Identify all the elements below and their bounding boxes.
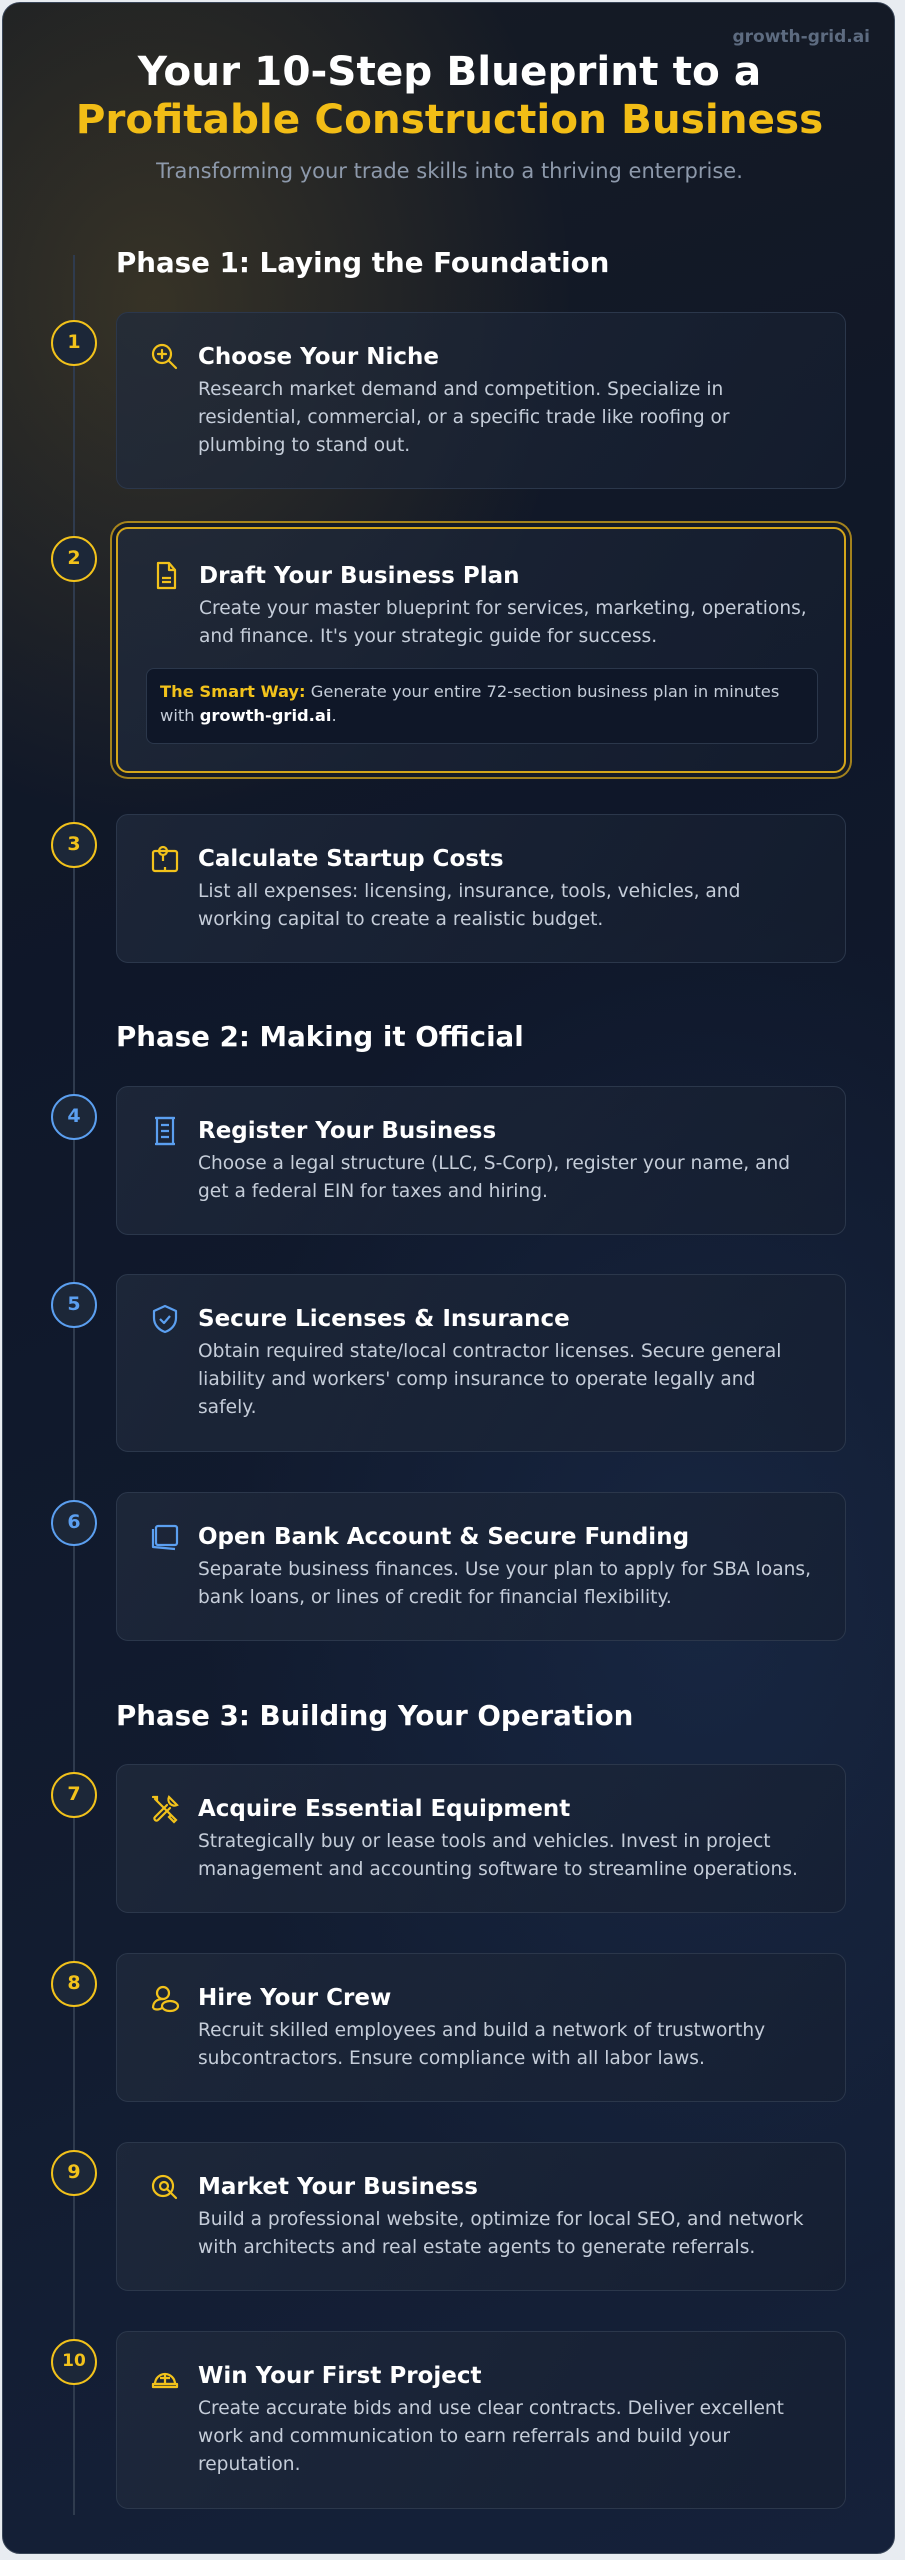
callout: smart way: with growth-grid.ai. (160, 706, 337, 725)
phase 3 heading: Phase 3: Building Your Operation (116, 1699, 633, 1732)
step 2 number: 2 (67, 547, 81, 569)
card: step 6 (116, 1492, 846, 1641)
card: step 5: Obtain required state/local contractor licenses. Secure general (198, 1341, 781, 1362)
card: step 10 (116, 2331, 846, 2509)
card: step 6: Open Bank Account & Secure Funding (198, 1524, 689, 1550)
card: step 10: work and communication to earn referrals and build your (198, 2426, 730, 2447)
step 3 number (51, 822, 97, 868)
callout: smart way: The Smart Way: Generate your entire 72-section business plan in minutes (160, 682, 779, 701)
card: step 4 (116, 1086, 846, 1235)
step 7 number: 7 (67, 1783, 81, 1805)
step 9 number: 9 (67, 2161, 81, 2183)
card: step 7: Acquire Essential Equipment (198, 1796, 570, 1822)
title: Profitable Construction Business (76, 95, 823, 143)
icon: register document (155, 1116, 175, 1146)
step 2 number (51, 536, 97, 582)
step 1 number (51, 320, 97, 366)
card: step 9: with architects and real estate agents to generate referrals. (198, 2237, 755, 2258)
icon: shield check (152, 1304, 178, 1334)
icon: bank card (152, 1524, 178, 1550)
icon: calculator tag (152, 846, 178, 872)
card: step 1: plumbing to stand out. (198, 435, 410, 456)
card: step 8: Recruit skilled employees and build a network of trustworthy (198, 2020, 765, 2041)
card: step 4: Register Your Business (198, 1118, 496, 1144)
card: step 5: Secure Licenses & Insurance (198, 1306, 570, 1332)
card: step 6: bank loans, or lines of credit for financial flexibility. (198, 1587, 672, 1608)
step 9 number (51, 2150, 97, 2196)
card: step 10: Win Your First Project (198, 2363, 481, 2389)
card: step 8: subcontractors. Ensure compliance with all labor laws. (198, 2048, 705, 2069)
card: step 4: Choose a legal structure (LLC, S-Corp), register your name, and (198, 1153, 790, 1174)
icon: magnifier plus (152, 344, 178, 370)
icon: document (156, 562, 176, 590)
card: step 5: liability and workers' comp insurance to operate legally and (198, 1369, 755, 1390)
card: step 3: working capital to create a realistic budget. (198, 909, 603, 930)
icon: tools (152, 1795, 179, 1824)
step 10 number: 10 (62, 2351, 86, 2371)
step 7 number (51, 1772, 97, 1818)
title (76, 47, 823, 143)
card: step 10: Create accurate bids and use clear contracts. Deliver excellent (198, 2398, 784, 2419)
card: step 3 (116, 814, 846, 963)
card: step 1 (116, 312, 846, 489)
icon: target search (152, 2174, 178, 2200)
card: step 4: get a federal EIN for taxes and hiring. (198, 1181, 548, 1202)
step 10 number (51, 2339, 97, 2385)
card: step 9: Build a professional website, optimize for local SEO, and network (198, 2209, 803, 2230)
title: Your 10-Step Blueprint to a (138, 47, 761, 95)
step 5 number: 5 (67, 1293, 81, 1315)
phase 1 heading: Phase 1: Laying the Foundation (116, 246, 609, 279)
card: step 1: Choose Your Niche (198, 344, 439, 370)
step 6 number: 6 (67, 1511, 81, 1533)
card: step 1: Research market demand and competition. Specialize in (198, 379, 723, 400)
card: step 3: Calculate Startup Costs (198, 846, 504, 872)
card: step 2 highlighted: Draft Your Business Plan (199, 563, 520, 589)
card: step 5: safely. (198, 1397, 256, 1418)
step 5 number (51, 1282, 97, 1328)
card: step 5 (116, 1274, 846, 1452)
card: step 2 highlighted (116, 527, 846, 773)
step 8 number (51, 1961, 97, 2007)
step 3 number: 3 (67, 833, 81, 855)
card: step 2 highlighted: Create your master blueprint for services, marketing, operations, (199, 598, 807, 619)
card: step 9 (116, 2142, 846, 2291)
card: step 7 (116, 1764, 846, 1913)
card: step 8 (116, 1953, 846, 2102)
card: step 3: List all expenses: licensing, insurance, tools, vehicles, and (198, 881, 740, 902)
step 4 number (51, 1094, 97, 1140)
card: step 7: management and accounting software to streamline operations. (198, 1859, 798, 1880)
brand label: growth-grid.ai (732, 27, 870, 47)
card: step 1: residential, commercial, or a specific trade like roofing or (198, 407, 730, 428)
subtitle: Transforming your trade skills into a thriving enterprise. (156, 159, 743, 183)
phase 2 heading: Phase 2: Making it Official (116, 1020, 524, 1053)
card: step 9: Market Your Business (198, 2174, 478, 2200)
icon: crew (152, 1986, 180, 2012)
card: step 6: Separate business finances. Use your plan to apply for SBA loans, (198, 1559, 811, 1580)
card: step 2 highlighted: and finance. It's your strategic guide for success. (199, 626, 657, 647)
step 1 number: 1 (67, 331, 81, 353)
step 6 number (51, 1500, 97, 1546)
card: step 7: Strategically buy or lease tools and vehicles. Invest in project (198, 1831, 771, 1852)
step 4 number: 4 (67, 1105, 81, 1127)
step 8 number: 8 (67, 1972, 81, 1994)
callout: smart way (146, 668, 818, 744)
icon: hard hat (152, 2372, 178, 2388)
card: step 10: reputation. (198, 2454, 300, 2475)
card: step 8: Hire Your Crew (198, 1985, 391, 2011)
